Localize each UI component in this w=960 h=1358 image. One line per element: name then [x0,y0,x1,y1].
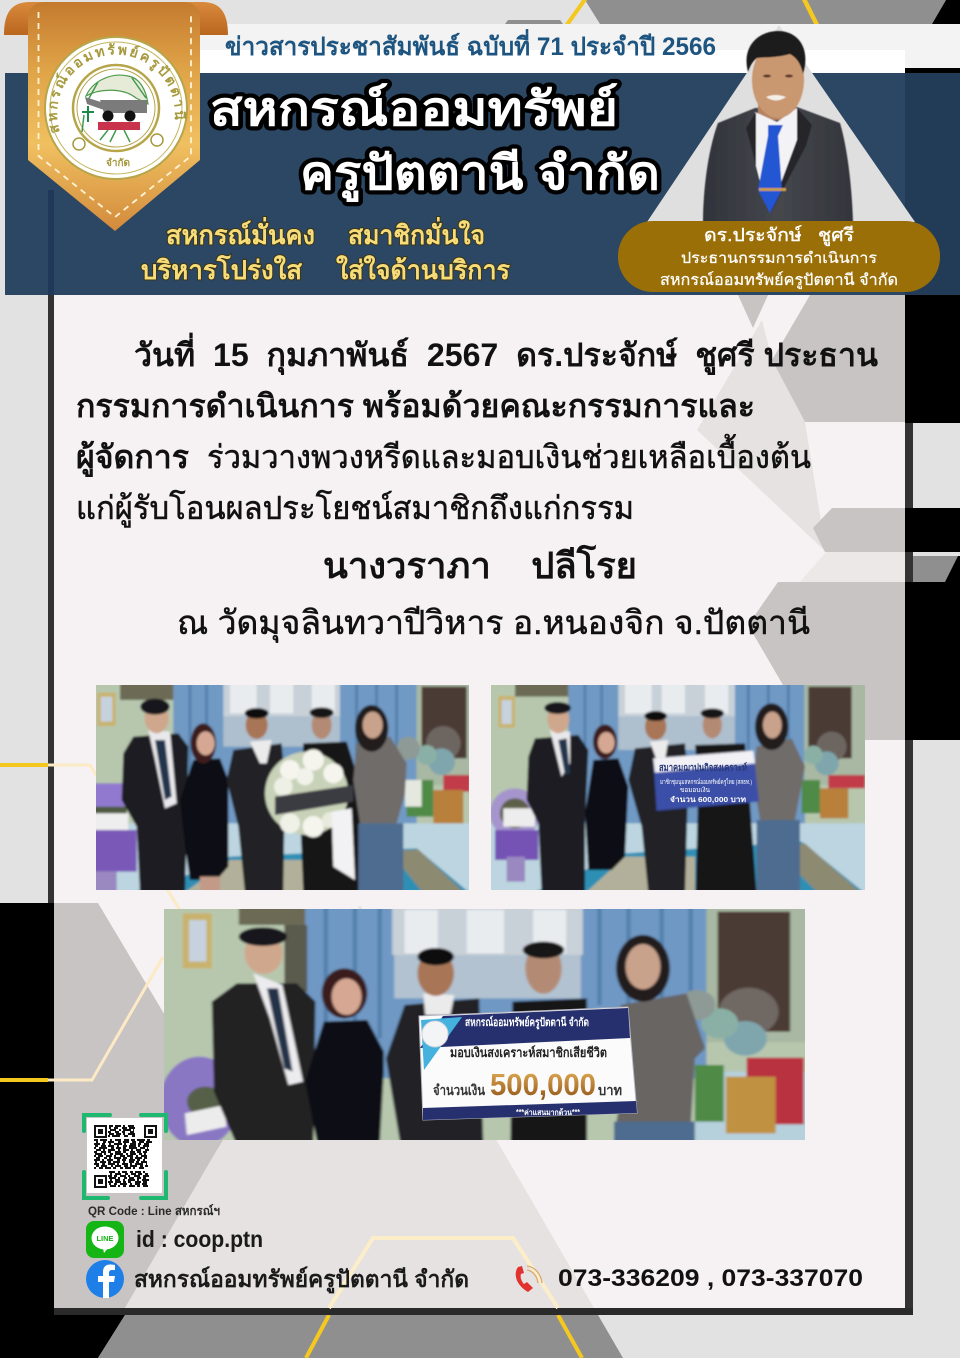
body text: ร่วมวางพวงหรีดและมอบเงินช่วยเหลือเบื้องต้น [207,434,811,475]
tie clip [759,188,786,191]
name plate pill: ดร.ประจักษ์ ชูศรี [704,225,854,246]
organisation title: สหกรณ์ออมทรัพย์ [210,82,618,135]
name plate pill: สหกรณ์ออมทรัพย์ครูปัตตานี จำกัด [660,271,898,290]
people [212,983,315,1145]
icon: Facebook [86,1260,124,1298]
body text: ผู้จัดการ [76,439,189,478]
body text: วันที่ 15 กุมภาพันธ์ 2567 ดร.ประจักษ์ ชูศรี ประธาน [134,332,878,376]
smile [766,95,786,100]
seal: จำกัด [106,157,130,169]
hair [747,31,805,74]
cheque board: 500,000 [490,1067,596,1102]
sign [652,762,760,812]
organisation title: ครูปัตตานี จำกัด [300,146,660,203]
body text: นางวราภา ปลีโรย [323,544,637,586]
sign caption: มาชิกชุมนุมสหกรณ์ออมทรัพย์ครูไทย (สสธท.) [660,778,752,786]
portrait backdrop triangle [647,25,915,222]
organisation title [210,82,660,203]
photo: laying the wreath [96,685,469,890]
cheque board: มอบเงินสงเคราะห์สมาชิกเสียชีวิต [450,1045,607,1060]
sign caption: จำนวน 600,000 บาท [670,795,746,804]
body text: ณ วัดมุจลินทวาปีวิหาร อ.หนองจิก จ.ปัตตานี [177,604,810,643]
icon: LINE [86,1221,124,1258]
name plate pill [618,221,940,292]
seal: สหกรณ์ออมทรัพย์ครูปัตตานี [48,43,187,134]
tie [758,125,783,213]
cheque board: บาท [598,1082,622,1098]
wreath [265,752,348,835]
face [752,42,804,118]
cheque board: จำนวนเงิน [433,1082,485,1098]
people [527,735,588,893]
sign caption: ขอมอบเงิน [680,786,711,794]
portrait of chairman [703,31,853,222]
QR caption: QR Code : Line สหกรณ์ฯ [88,1204,220,1218]
slogan: สมาชิกมั่นใจ [348,216,485,250]
ribbon stitching [38,12,191,217]
lapels [746,108,812,214]
body text: กรรมการดำเนินการ พร้อมด้วยคณะกรรมการและ [76,388,755,424]
seal [44,36,188,180]
ribbon with seal [4,2,228,231]
phone numbers: 073-336209 , 073-337070 [558,1265,863,1292]
people [122,733,188,893]
header band [5,73,960,295]
slogan: ใส่ใจด้านบริการ [336,255,510,285]
body text [76,332,878,643]
photo: receiving the association cheque [491,685,865,890]
neck [758,95,796,120]
ribbon body [28,2,200,231]
slogan: บริหารโปร่งใส [141,254,302,285]
slogan: สหกรณ์มั่นคง [166,216,315,250]
newsletter issue line: ข่าวสารประชาสัมพันธ์ ฉบับที่ 71 ประจำปี 2566 [225,29,716,61]
QR frame [84,1115,166,1198]
icon: LINE: LINE [96,1234,114,1243]
cheque board: ***ค่าแสนมากด้วน*** [516,1107,581,1117]
QR code [84,1115,166,1198]
sign caption: สมาคมฌาปนกิจสงเคราะห์ [659,762,747,774]
suit [703,107,853,222]
panel: content card [48,295,913,1315]
Line id: id : coop.ptn [136,1226,263,1252]
shirt [755,108,797,212]
cheque board [419,1007,637,1120]
ribbon scroll [4,2,228,35]
name plate pill: ประธานกรรมการดำเนินการ [681,250,877,267]
slogan [141,216,510,285]
sign caption [659,762,752,804]
photo: group with cheque board [160,905,811,1152]
cheque board: สหกรณ์ออมทรัพย์ครูปัตตานี จำกัด [465,1015,589,1030]
icon: phone [516,1266,542,1292]
Facebook page name: สหกรณ์ออมทรัพย์ครูปัตตานี จำกัด [134,1266,469,1294]
body text: แก่ผู้รับโอนผลประโยชน์สมาชิกถึงแก่กรรม [76,490,634,528]
